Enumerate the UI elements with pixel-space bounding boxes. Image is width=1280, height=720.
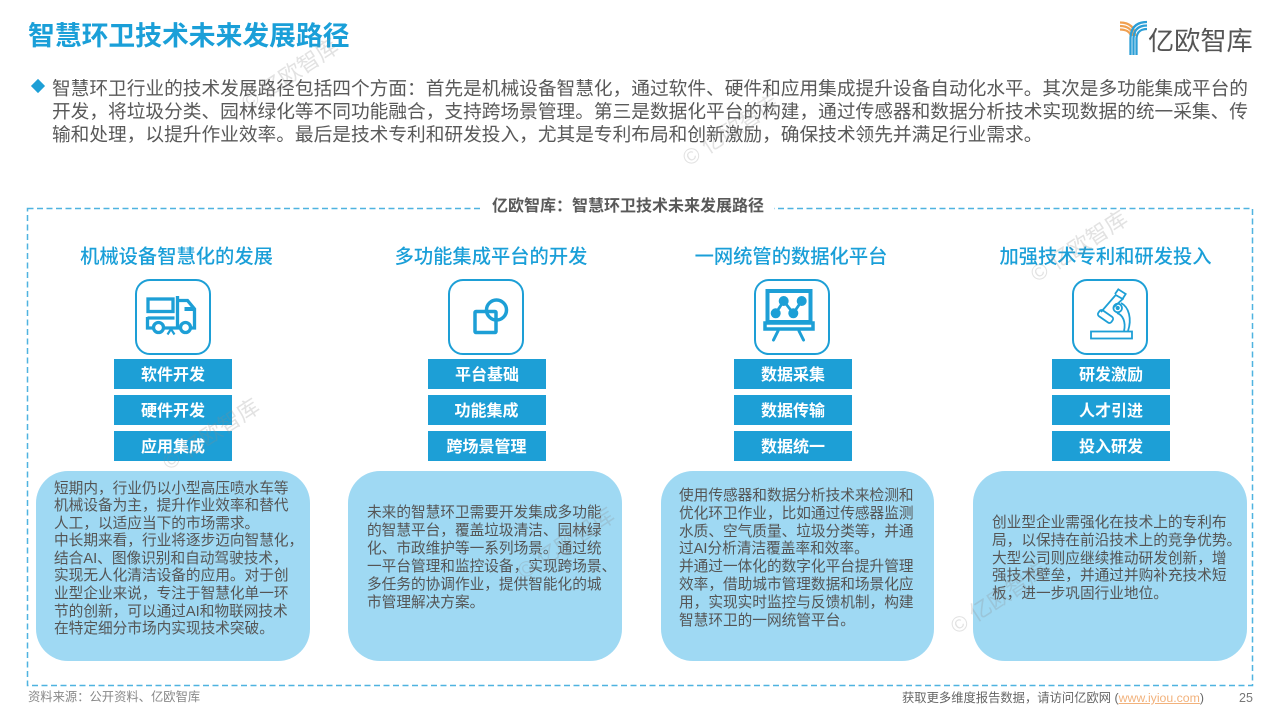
text: mechanical equipment: 节的创新，可以通过AI和物联网技术 xyxy=(54,604,288,620)
frame label xyxy=(482,195,774,219)
text: patents and R&D xyxy=(992,514,1241,602)
text: data platform: 水质、空气质量、垃圾分类等，并通 xyxy=(679,524,914,540)
tag: 软件开发: 软件开发 xyxy=(141,367,205,384)
tag: 数据采集: 数据采集 xyxy=(761,367,825,384)
text: patents and R&D: 大型公司则应继续推动研发创新，增 xyxy=(992,551,1227,567)
watermark 7: © 亿欧智库 xyxy=(946,558,1052,639)
tag: 研发激励 xyxy=(1052,359,1170,389)
text: data platform: 效率，借助城市管理数据和场景化应 xyxy=(679,577,914,593)
text: data platform xyxy=(679,487,914,629)
text: data platform: 智慧环卫的一网统管平台。 xyxy=(679,613,855,629)
tag: 数据传输: 数据传输 xyxy=(761,403,825,420)
logo: 亿欧智库 xyxy=(1120,20,1253,56)
tag: 研发激励: 研发激励 xyxy=(1079,367,1143,384)
text: integrated platform: 多任务的协调作业，提供智能化的城 xyxy=(367,577,602,593)
text: mechanical equipment: 业型企业来说，专注于智慧化单一环 xyxy=(54,586,289,602)
bullet diamond xyxy=(31,79,45,93)
watermark 3: © 亿欧智库 xyxy=(1026,206,1132,287)
tag: 数据统一 xyxy=(734,431,852,461)
text: mechanical equipment: 人工，以适应当下的市场需求。 xyxy=(54,516,259,532)
tag: 数据统一: 数据统一 xyxy=(761,439,825,456)
tag: 人才引进: 人才引进 xyxy=(1079,403,1143,420)
watermark 1: © 亿欧智库 xyxy=(237,34,343,115)
text: mechanical equipment: 短期内，行业仍以小型高压喷水车等 xyxy=(54,480,289,496)
logo text: 亿欧智库 xyxy=(1148,26,1253,56)
text: patents and R&D: 强技术壁垒，并通过并购补充技术短 xyxy=(992,568,1227,584)
tag: 应用集成: 应用集成 xyxy=(141,439,205,456)
tag: 投入研发 xyxy=(1052,431,1170,461)
text: patents and R&D: 创业型企业需强化在技术上的专利布 xyxy=(992,515,1227,531)
text: data platform: 用，实现实时监控与反馈机制，构建 xyxy=(679,595,914,611)
tag: 软件开发 xyxy=(114,359,232,389)
frame label: 亿欧智库：智慧环卫技术未来发展路径 xyxy=(492,198,764,215)
tag: 应用集成 xyxy=(114,431,232,461)
page number: 25 xyxy=(1239,690,1253,704)
text: patents and R&D: 局，以保持在前沿技术上的竞争优势。 xyxy=(992,533,1241,549)
tag: 平台基础 xyxy=(428,359,546,389)
icon: shapes xyxy=(448,279,524,355)
intro text: 智慧环卫行业的技术发展路径包括四个方面：首先是机械设备智慧化，通过软件、硬件和应用集成提升设备自动化水平。其次是多功能集成平台的 xyxy=(52,78,1248,98)
intro text: 开发，将垃圾分类、园林绿化等不同功能融合，支持跨场景管理。第三是数据化平台的构建，通过传感器和数据分析技术实现数据的统一采集、传 xyxy=(52,100,1248,122)
text: integrated platform: 未来的智慧环卫需要开发集成多功能 xyxy=(367,505,602,521)
tag: 功能集成 xyxy=(428,395,546,425)
intro text xyxy=(52,78,1248,144)
text: data platform: 优化环卫作业，比如通过传感器监测 xyxy=(679,506,914,522)
text: mechanical equipment: 中长期来看，行业将逐步迈向智慧化， xyxy=(54,533,303,549)
tag: 跨场景管理 xyxy=(428,431,546,461)
text: mechanical equipment: 在特定细分市场内实现技术突破。 xyxy=(54,621,274,637)
text: integrated platform: 市管理解决方案。 xyxy=(367,595,484,611)
icon: data board xyxy=(754,279,830,355)
heading: column 3: 一网统管的数据化平台 xyxy=(695,247,887,268)
text: integrated platform xyxy=(367,504,616,611)
tag: 跨场景管理: 跨场景管理 xyxy=(446,439,526,456)
tag: 数据传输 xyxy=(734,395,852,425)
text: mechanical equipment: 结合AI、图像识别和自动驾驶技术， xyxy=(54,551,288,567)
text: patents and R&D: 板，进一步巩固行业地位。 xyxy=(992,586,1168,602)
footer link text: 获取更多维度报告数据，请访问亿欧网 (www.iyiou.com) xyxy=(902,691,1204,705)
icon: sweeper truck xyxy=(134,279,210,355)
logo mark xyxy=(1120,20,1147,55)
tag: 功能集成: 功能集成 xyxy=(454,403,518,420)
text: data platform: 使用传感器和数据分析技术来检测和 xyxy=(679,488,914,504)
tag: 投入研发: 投入研发 xyxy=(1079,439,1143,456)
panel: mechanical equipment xyxy=(36,471,310,661)
title: 智慧环卫技术未来发展路径 xyxy=(28,21,350,51)
watermark 2: © 亿欧智库 xyxy=(678,90,784,171)
text: mechanical equipment: 机械设备为主，提升作业效率和替代 xyxy=(54,498,289,514)
text: data platform: 过AI分析清洁覆盖率和效率。 xyxy=(679,541,869,557)
text: mechanical equipment xyxy=(54,480,303,637)
text: mechanical equipment: 实现无人化清洁设备的应用。对于创 xyxy=(54,568,289,584)
heading: column 2: 多功能集成平台的开发 xyxy=(395,247,587,268)
text: integrated platform: 一平台管理和监控设备，实现跨场景、 xyxy=(367,559,616,575)
watermark 6: © 亿欧智库 xyxy=(513,503,619,584)
tag: 人才引进 xyxy=(1052,395,1170,425)
heading: column 1: 机械设备智慧化的发展 xyxy=(80,247,273,268)
panel: data platform xyxy=(660,471,934,661)
watermark 5: © 亿欧智库 xyxy=(158,394,264,475)
text: integrated platform: 的智慧平台，覆盖垃圾清洁、园林绿 xyxy=(367,523,602,539)
tag: 数据采集 xyxy=(734,359,852,389)
text: integrated platform: 化、市政维护等一系列场景。通过统 xyxy=(367,541,602,557)
tag: 平台基础: 平台基础 xyxy=(455,367,519,384)
panel: integrated platform xyxy=(348,471,622,661)
source note: 资料来源：公开资料、亿欧智库 xyxy=(28,690,200,704)
tag: 硬件开发: 硬件开发 xyxy=(141,403,205,420)
text: data platform: 并通过一体化的数字化平台提升管理 xyxy=(679,559,914,575)
icon: microscope xyxy=(1072,279,1148,355)
panel: patents and R&D xyxy=(973,471,1246,661)
heading: column 4: 加强技术专利和研发投入 xyxy=(999,247,1212,268)
intro text: 输和处理，以提升作业效率。最后是技术专利和研发投入，尤其是专利布局和创新激励，确保技术领先并满足行业需求。 xyxy=(52,124,1042,144)
tag: 硬件开发 xyxy=(114,395,232,425)
